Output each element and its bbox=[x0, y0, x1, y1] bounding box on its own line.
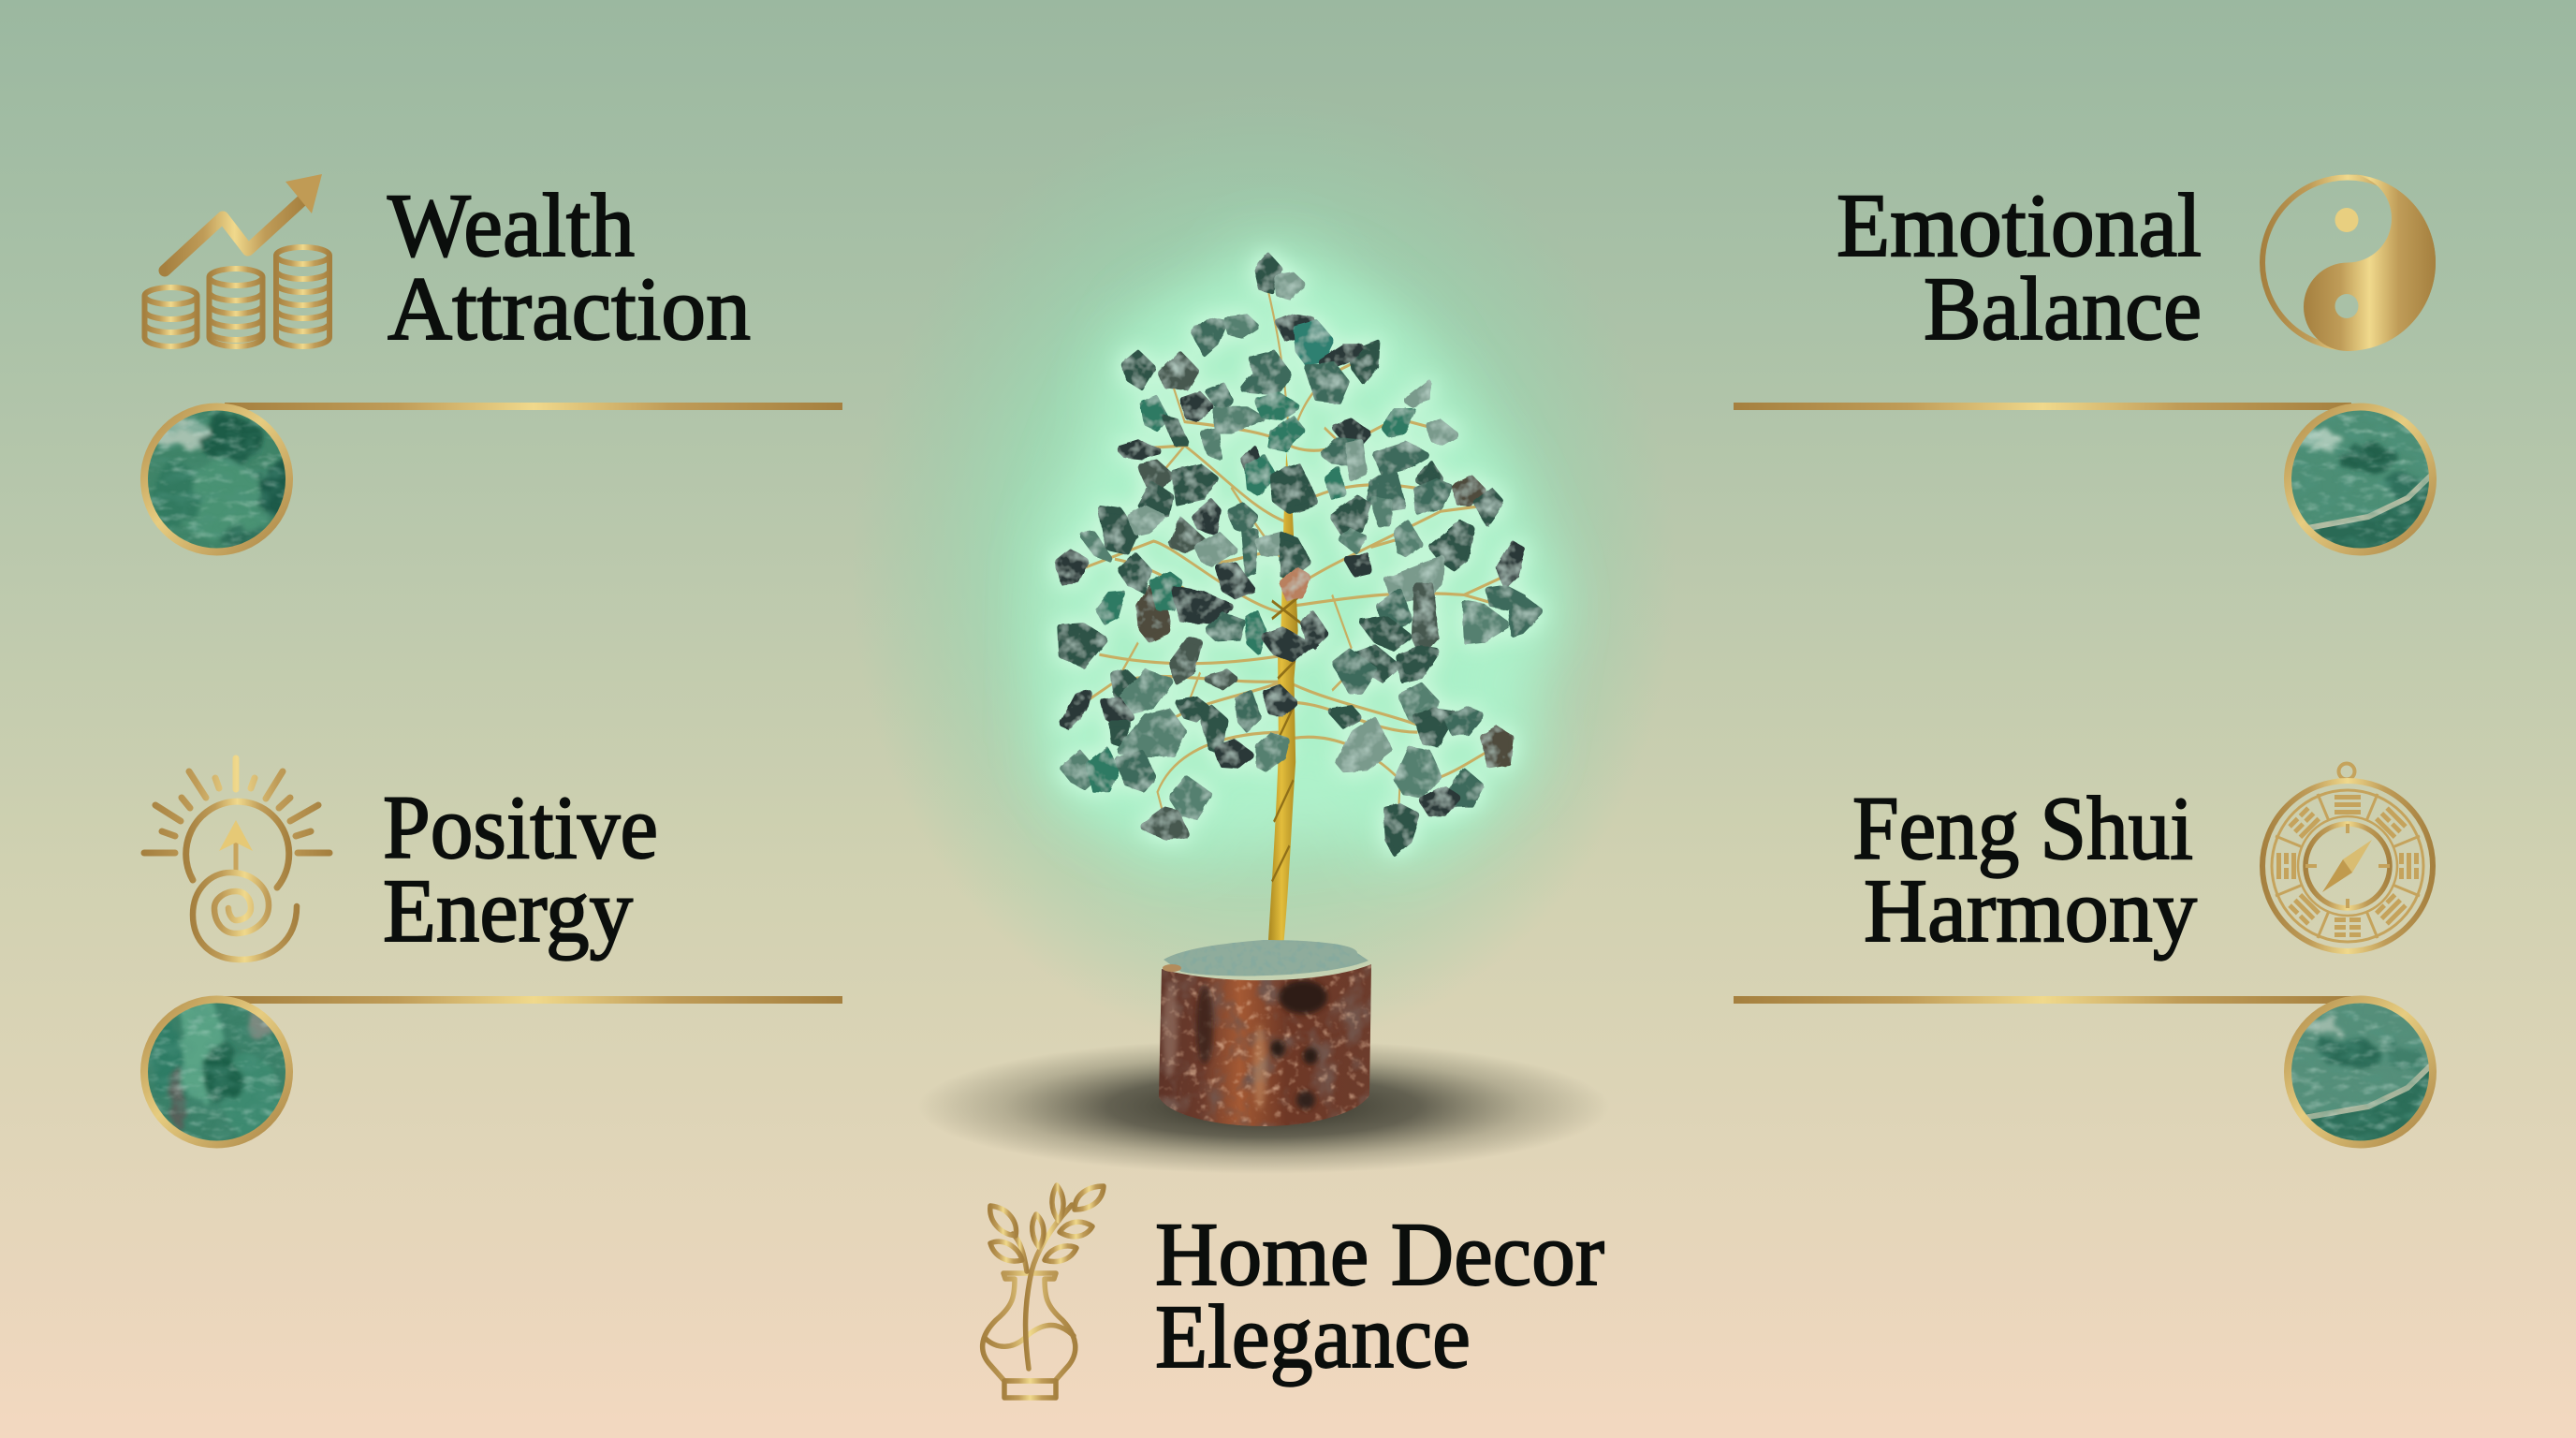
heading: Positive Energy bbox=[383, 777, 658, 961]
ground shadow bbox=[917, 1039, 1610, 1174]
heading: Wealth Attraction: Wealth bbox=[388, 175, 635, 275]
heading: Positive Energy: Positive bbox=[383, 777, 658, 877]
central tree illustration bbox=[896, 187, 1632, 1170]
icon: bagua compass bbox=[2262, 764, 2433, 951]
icon: yin yang bbox=[2262, 174, 2436, 351]
heading: Wealth Attraction: Attraction bbox=[388, 258, 751, 359]
aventurine leaves bbox=[1058, 256, 1541, 853]
gravel top bbox=[1163, 940, 1368, 976]
gold divider line bbox=[225, 996, 842, 1004]
panel: Wealth Attraction bbox=[140, 174, 842, 557]
stone swatch bbox=[140, 992, 295, 1152]
gold divider line bbox=[1734, 403, 2351, 410]
icon: coin stacks with rising arrow bbox=[144, 174, 329, 346]
golden trunk bbox=[1268, 451, 1303, 945]
panel: Feng Shui Harmony bbox=[1734, 764, 2443, 1152]
icon: radiating spiral energy bbox=[144, 758, 329, 960]
heading: Emotional Balance: Emotional bbox=[1837, 175, 2202, 275]
panel: Emotional Balance bbox=[1734, 174, 2443, 562]
panel: Positive Energy bbox=[140, 758, 842, 1152]
heading: Home Decor Elegance: Home Decor bbox=[1155, 1204, 1604, 1304]
stone swatch bbox=[140, 403, 301, 557]
heading: Home Decor Elegance: Elegance bbox=[1155, 1286, 1471, 1387]
gold divider line bbox=[225, 403, 842, 410]
icon: vase with leaves bbox=[983, 1185, 1104, 1398]
gold wire branches bbox=[1076, 290, 1526, 822]
heading: Wealth Attraction bbox=[388, 175, 751, 359]
heading: Emotional Balance bbox=[1837, 175, 2202, 359]
heading: Feng Shui Harmony: Feng Shui bbox=[1852, 778, 2193, 878]
heading: Feng Shui Harmony: Harmony bbox=[1864, 860, 2197, 961]
tree glow bbox=[852, 94, 1676, 1049]
heading: Home Decor Elegance bbox=[1155, 1204, 1604, 1387]
wood base bbox=[1159, 940, 1371, 1126]
stone swatch bbox=[2284, 992, 2443, 1152]
heading: Feng Shui Harmony bbox=[1852, 778, 2197, 961]
heading: Positive Energy: Energy bbox=[383, 860, 633, 961]
panel: Home Decor Elegance bbox=[983, 1185, 1604, 1398]
stone swatch bbox=[2284, 403, 2443, 562]
gold divider line bbox=[1734, 996, 2351, 1004]
heading: Emotional Balance: Balance bbox=[1924, 258, 2202, 359]
